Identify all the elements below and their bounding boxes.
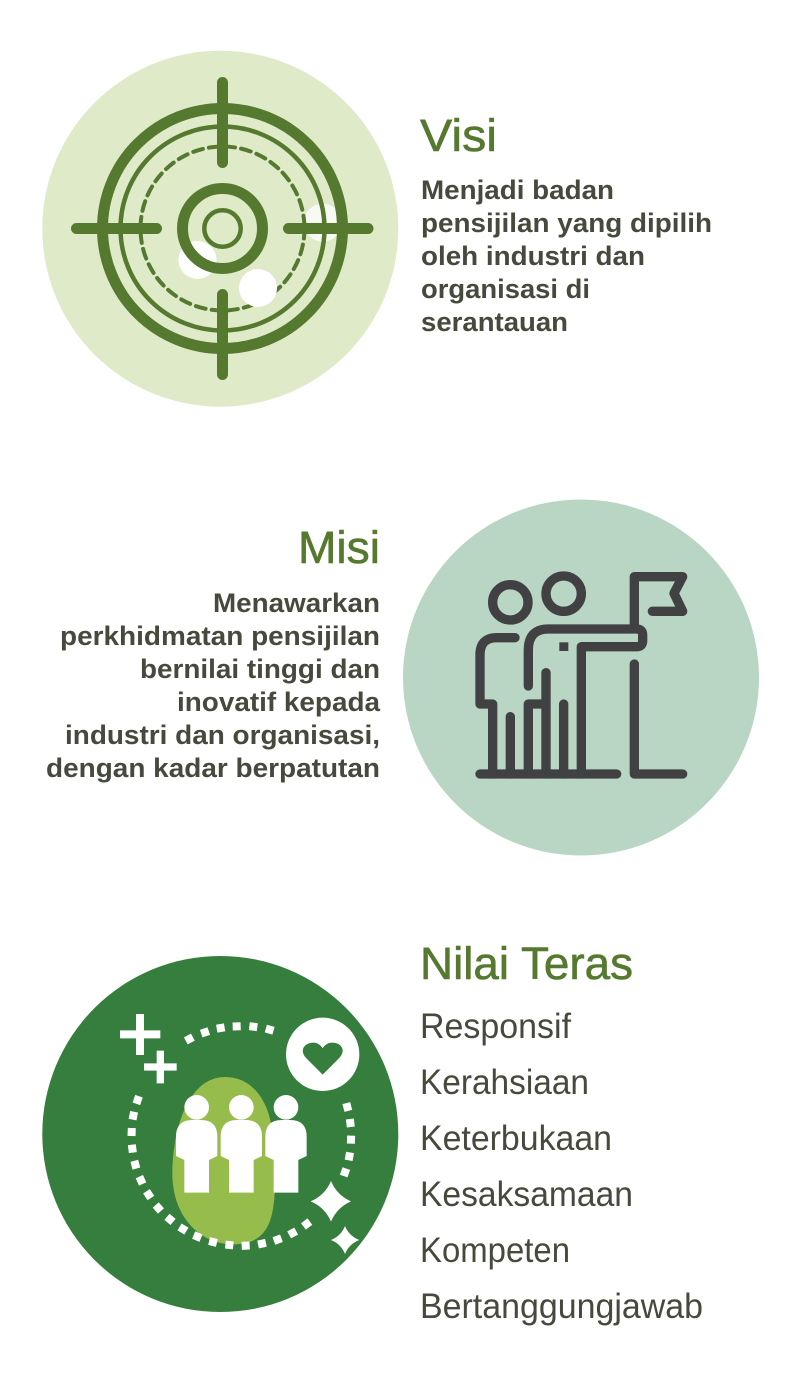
heading: Visi: Visi (420, 110, 497, 161)
text: misi statement (46, 588, 381, 783)
panel: misi (46, 500, 759, 856)
panel: nilai teras (42, 938, 703, 1326)
text: core values list (420, 1007, 703, 1326)
heading: Misi: Misi (298, 522, 380, 573)
text: misi statement: industri dan organisasi, (65, 720, 380, 750)
text: visi statement: serantauan (421, 307, 568, 337)
text: core values list: Kerahsiaan (420, 1063, 589, 1102)
text: misi statement: Menawarkan (213, 588, 380, 618)
text: visi statement: organisasi di (421, 274, 590, 304)
text: core values list: Kesaksamaan (420, 1175, 633, 1214)
text: core values list: Responsif (420, 1007, 571, 1046)
icon: people with flag (403, 500, 759, 856)
panel: visi (42, 51, 712, 407)
icon: team with heart (42, 956, 398, 1312)
text: misi statement: dengan kadar berpatutan (46, 753, 380, 783)
icon: target (42, 51, 398, 407)
text: core values list: Bertanggungjawab (420, 1287, 703, 1326)
text: visi statement: pensijilan yang dipilih (421, 208, 712, 238)
text: visi statement: oleh industri dan (421, 241, 645, 271)
text: visi statement (421, 175, 712, 337)
text: misi statement: bernilai tinggi dan (140, 654, 380, 684)
text: misi statement: perkhidmatan pensijilan (60, 621, 380, 651)
text: core values list: Keterbukaan (420, 1119, 612, 1158)
heading: Nilai Teras: Nilai Teras (420, 938, 633, 989)
text: misi statement: inovatif kepada (177, 687, 381, 717)
text: visi statement: Menjadi badan (421, 175, 614, 205)
text: core values list: Kompeten (420, 1231, 570, 1270)
